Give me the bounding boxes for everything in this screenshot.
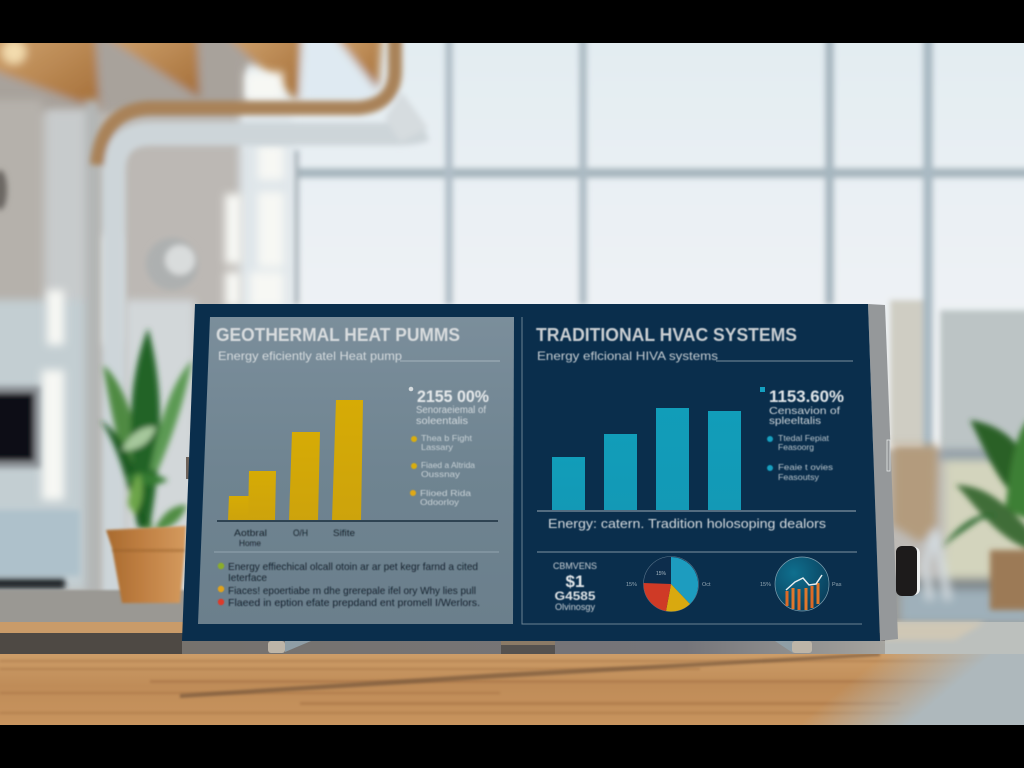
legend: geothermal: Thea b Fight <box>421 433 473 443</box>
wall light stripes <box>42 72 284 500</box>
caption: traditional: Energy: catern. Tradition holosoping dealors <box>548 517 826 531</box>
legend: geothermal: Flioed Rida <box>420 488 471 498</box>
left wall columns <box>0 100 292 600</box>
plant right <box>942 418 1024 610</box>
axis labels: Home <box>239 538 261 548</box>
axis labels: Sifite <box>333 528 355 539</box>
legend: traditional: Feasoutsy <box>778 472 820 482</box>
axis labels: Aotbral <box>234 528 267 539</box>
legend: traditional: Feasoorg <box>778 442 814 452</box>
window <box>245 30 1024 453</box>
stat: traditional <box>760 387 844 427</box>
notes list: geothermal: Energy effiechical olcall otoin ar ar pet kegr farnd a cited <box>228 562 478 573</box>
bar chart: geothermal <box>217 400 498 548</box>
display feet <box>268 641 812 654</box>
pie chart: 15% <box>626 582 637 588</box>
floor <box>0 590 1024 624</box>
notes list: geothermal: Flaeed in eption efate prepdand ent promell I/Werlors. <box>228 598 480 609</box>
axis labels <box>234 528 355 548</box>
cool right side of table <box>780 654 1024 725</box>
stat: geothermal: Senoraeiemal of <box>416 405 486 416</box>
wall items <box>0 170 198 589</box>
notes list: geothermal: Fiaces! epoertiabe m dhe grerepale ifel ory Why lies pull <box>228 586 476 597</box>
pot left <box>106 526 186 603</box>
stat: geothermal: 2155 00% <box>417 387 489 406</box>
display panel <box>182 304 880 641</box>
line and bar disc <box>760 557 842 611</box>
leaves <box>100 328 192 530</box>
pie chart: 15% <box>656 571 667 577</box>
heading: geothermal: GEOTHERMAL HEAT PUMMS <box>216 324 460 345</box>
chair and right side <box>860 445 1024 623</box>
legend: geothermal: Lassary <box>421 442 454 452</box>
device side edge <box>868 304 898 641</box>
axis labels: O/H <box>293 528 308 539</box>
heading: traditional: TRADITIONAL HVAC SYSTEMS <box>536 324 797 345</box>
bar chart: traditional <box>537 408 856 511</box>
shadow stripe on table <box>180 653 880 698</box>
panel: traditional hvac systems <box>522 317 862 624</box>
stat: geothermal: soleentalis <box>416 416 468 427</box>
legend: geothermal: Oussnay <box>421 469 461 479</box>
cost stat <box>553 561 597 612</box>
duct <box>97 30 428 600</box>
background: blurred office scene <box>0 30 1024 633</box>
cost stat: $1 <box>566 572 584 591</box>
left side notch <box>186 457 189 479</box>
legend: geothermal: Odoorloy <box>420 497 460 507</box>
notes list: geothermal <box>218 562 480 609</box>
stat: traditional: spleeltalis <box>769 415 821 427</box>
notes list: geothermal: Ieterface <box>228 573 267 584</box>
line and bar disc: Pas <box>832 582 842 588</box>
strip under display <box>182 641 902 654</box>
cost stat: CBMVENS <box>553 561 597 572</box>
legend: geothermal: Fiaed a Altrida <box>421 460 475 470</box>
cost stat: Olvinosgy <box>555 602 596 612</box>
line and bar disc: 15% <box>760 582 771 588</box>
legend: traditional <box>767 433 833 482</box>
stat: traditional: Censavion of <box>769 405 840 417</box>
ceiling wall shade and beams <box>0 30 383 113</box>
subheading: geothermal: Energy eficiently atel Heat pump <box>218 349 402 363</box>
legend: traditional: Ttedal Fepiat <box>778 433 830 443</box>
stat: geothermal <box>409 387 489 427</box>
panel: geothermal heat pumps <box>198 317 514 624</box>
knob <box>896 546 920 596</box>
subheading: traditional: Energy eflcional HIVA systems <box>537 349 718 363</box>
table <box>0 622 1024 725</box>
legend: geothermal <box>410 433 475 507</box>
cost stat: G4585 <box>554 591 596 603</box>
pie chart: Oct <box>702 582 711 588</box>
legend: traditional: Feaie t ovies <box>778 462 833 472</box>
grain <box>0 660 1024 714</box>
plant left <box>100 328 192 603</box>
pie chart <box>626 556 711 612</box>
stat: traditional: 1153.60% <box>769 387 844 406</box>
